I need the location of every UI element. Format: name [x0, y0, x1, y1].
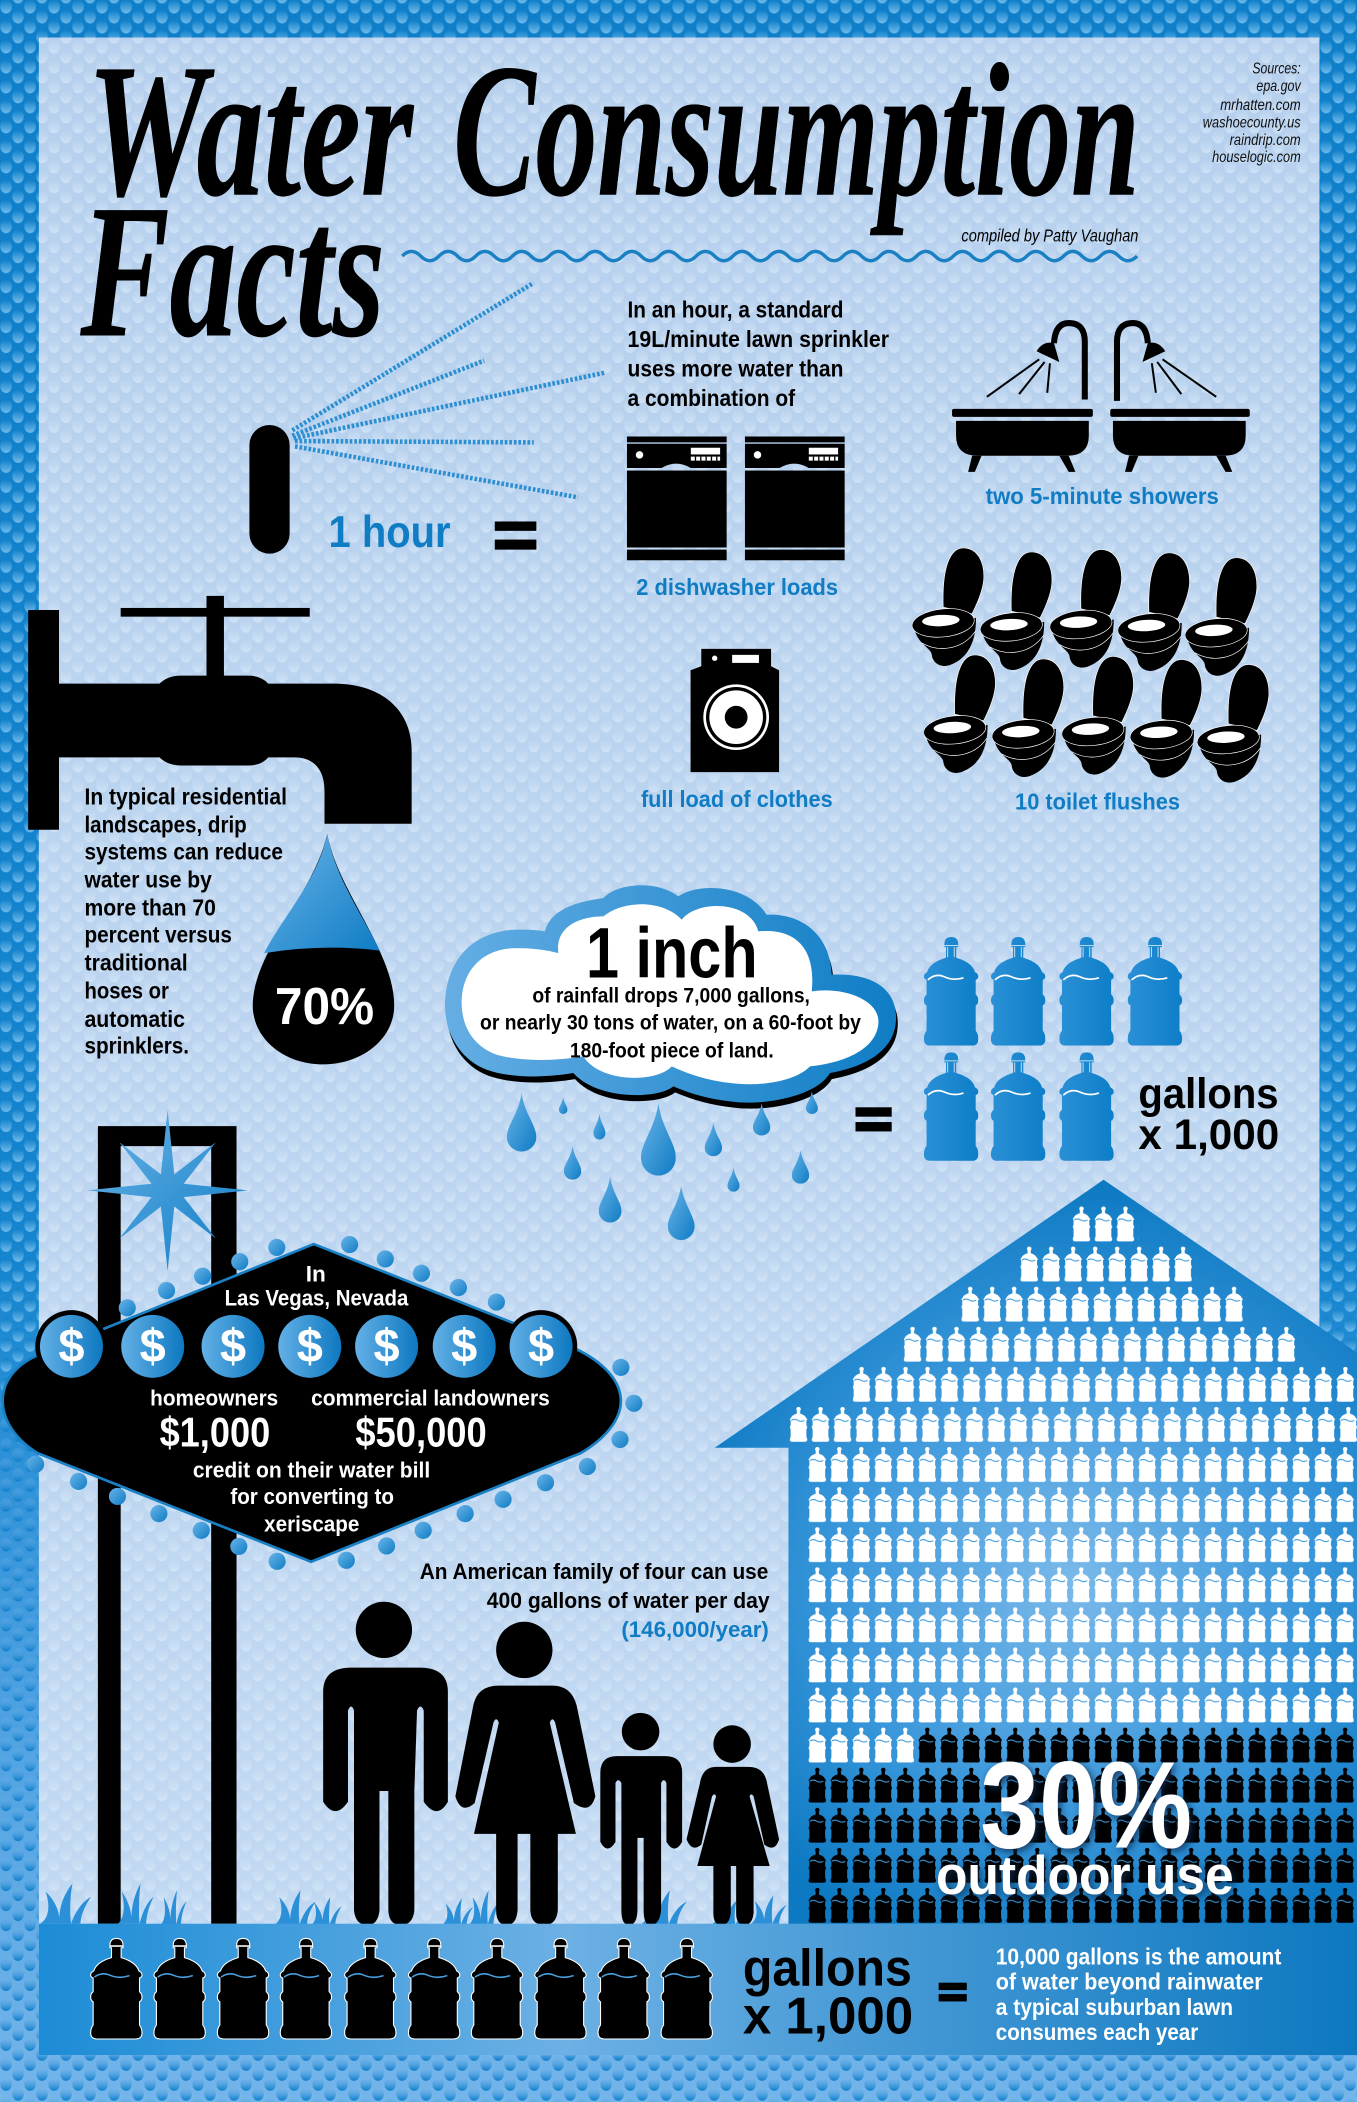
- lawn consumption text: of water beyond rainwater: [996, 1968, 1263, 1994]
- sources: mrhatten.com: [1220, 97, 1301, 114]
- dollar coins: $: [528, 1320, 554, 1372]
- sources: [1203, 61, 1302, 166]
- 30% outdoor use callout: [936, 1736, 1234, 1906]
- cloud with rainfall text: of rainfall drops 7,000 gallons,: [532, 984, 810, 1008]
- icon: sprinkler: [249, 283, 605, 554]
- label: gallons x 1,000: x 1,000: [1138, 1111, 1279, 1159]
- dollar coins: $: [58, 1320, 85, 1372]
- label: 10 toilet flushes: 10 toilet flushes: [1015, 789, 1180, 815]
- sign text: $50,000: [355, 1408, 487, 1455]
- 30% outdoor use callout: 30%: [980, 1736, 1192, 1874]
- bottom band: [39, 1924, 1357, 2055]
- sign text: Las Vegas, Nevada: [225, 1286, 409, 1311]
- sign text: for converting to: [230, 1484, 394, 1509]
- woman: [455, 1622, 595, 1925]
- Las Vegas sign: [3, 1236, 642, 1570]
- drip text: hoses or: [84, 978, 169, 1004]
- sprinkler text: In an hour, a standard: [628, 297, 843, 323]
- drip text: landscapes, drip: [84, 811, 247, 837]
- title: Facts: [80, 166, 385, 377]
- drip text: systems can reduce: [84, 838, 283, 864]
- family text: [420, 1559, 770, 1642]
- sources: Sources:: [1252, 61, 1301, 78]
- label: two 5-minute showers: two 5-minute showers: [986, 483, 1219, 509]
- icon: faucet: [28, 596, 412, 830]
- cloud with rainfall text: [445, 885, 898, 1109]
- icon: family of four: [323, 1602, 779, 1925]
- drip text: percent versus: [84, 921, 232, 947]
- label: 1 hour: 1 hour: [329, 508, 451, 557]
- equals sign: [495, 521, 536, 550]
- sprinkler text: 19L/minute lawn sprinkler: [628, 326, 889, 352]
- cloud with rainfall text: or nearly 30 tons of water, on a 60-foot by: [480, 1011, 861, 1035]
- dollar coins: $: [297, 1320, 323, 1372]
- drip text: sprinklers.: [84, 1033, 189, 1059]
- sign text: homeowners: [150, 1386, 278, 1411]
- cloud with rainfall text: 180-foot piece of land.: [570, 1039, 774, 1063]
- icon: ten toilets: [911, 548, 1269, 783]
- icon: washing machine: [691, 649, 779, 772]
- sprinkler text: a combination of: [628, 385, 796, 411]
- bottle rows, indoor use: [790, 1207, 1357, 1766]
- drip text: In typical residential: [84, 783, 287, 809]
- equals sign: [939, 1983, 967, 2001]
- sign text: $1,000: [160, 1408, 270, 1455]
- label: gallons x 1,000: [743, 1939, 913, 2046]
- sign board: [3, 1244, 621, 1562]
- sign posts: [98, 1126, 237, 1924]
- dollar coins: $: [140, 1320, 166, 1372]
- bulbs: [27, 1236, 642, 1570]
- family text: (146,000/year): [621, 1617, 769, 1642]
- sprinkler text: [628, 297, 889, 411]
- icon: seven blue bottles: [924, 937, 1182, 1161]
- equals sign: [856, 1107, 892, 1131]
- girl: [687, 1725, 779, 1925]
- label: gallons x 1,000: [1138, 1070, 1279, 1159]
- sign text: In: [306, 1262, 326, 1287]
- sources: epa.gov: [1256, 78, 1302, 95]
- label: gallons x 1,000: x 1,000: [743, 1988, 913, 2046]
- house shape: [715, 1180, 1357, 1925]
- icon: two showers: [952, 323, 1250, 472]
- title: Water: [87, 25, 414, 236]
- icon: star: [87, 1110, 248, 1271]
- dollar coins: [35, 1310, 577, 1383]
- icon: water drop 70%: 70%: [275, 978, 374, 1036]
- label: 2 dishwasher loads: 2 dishwasher loads: [636, 574, 838, 600]
- label: gallons x 1,000: gallons: [743, 1939, 912, 1997]
- lawn consumption text: 10,000 gallons is the amount: [996, 1944, 1282, 1970]
- dollar coins: $: [451, 1320, 477, 1372]
- sources: washoecounty.us: [1203, 114, 1301, 131]
- sprinkler text: uses more water than: [628, 356, 843, 382]
- wavy divider: [402, 251, 1137, 261]
- lawn consumption text: consumes each year: [996, 2019, 1198, 2045]
- drip text: automatic: [84, 1006, 185, 1032]
- dollar coins: $: [374, 1320, 400, 1372]
- family text: 400 gallons of water per day: [487, 1588, 770, 1613]
- family text: An American family of four can use: [420, 1559, 768, 1584]
- raindrops: [507, 1091, 818, 1240]
- boy: [600, 1713, 682, 1925]
- lawn consumption text: [996, 1944, 1282, 2045]
- drip text: traditional: [84, 950, 188, 976]
- cloud with rainfall text: 1 inch: [586, 914, 758, 993]
- house of bottles: [715, 1180, 1357, 1925]
- icon: two dishwashers: [627, 436, 845, 560]
- credit: compiled by: compiled by Patty Vaughan: [961, 225, 1138, 245]
- drip text: [84, 783, 287, 1059]
- 30% outdoor use callout: outdoor use: [936, 1844, 1234, 1906]
- lawn consumption text: a typical suburban lawn: [996, 1994, 1233, 2020]
- sign text: commercial landowners: [311, 1386, 550, 1411]
- sign text: xeriscape: [264, 1512, 359, 1537]
- drip text: more than 70: [84, 895, 216, 921]
- bottle rows, outdoor use: [809, 1728, 1357, 1924]
- grass: [40, 1883, 787, 1925]
- title: [80, 25, 1140, 377]
- label: gallons x 1,000: gallons: [1138, 1070, 1279, 1118]
- sign text: credit on their water bill: [193, 1457, 430, 1482]
- sources: raindrip.com: [1230, 132, 1301, 149]
- sources: houselogic.com: [1212, 149, 1301, 166]
- label: full load of clothes: full load of clothes: [641, 786, 833, 812]
- dollar coins: $: [220, 1320, 246, 1372]
- drip text: water use by: [84, 866, 212, 892]
- sign text: [150, 1262, 550, 1537]
- icon: water drop 70%: [253, 834, 394, 1064]
- man: [323, 1602, 448, 1925]
- icon: ten black jugs: [91, 1938, 712, 2039]
